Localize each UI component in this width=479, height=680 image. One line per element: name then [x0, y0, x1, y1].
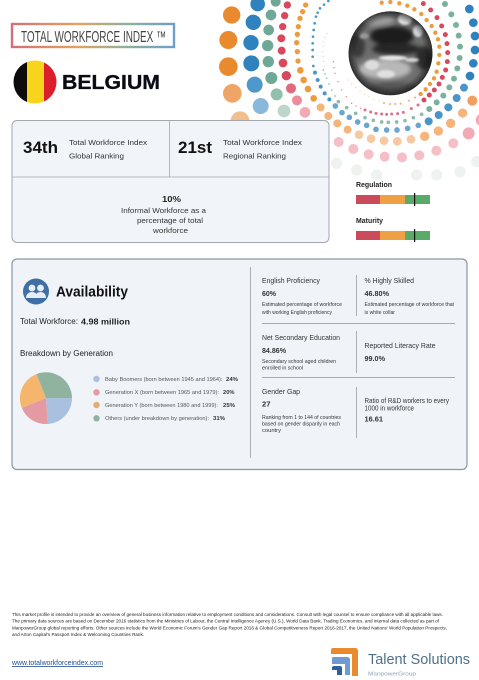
footer disclaimer: ManpowerGroup global reporting efforts. Other sources include the World Economic Forum's Gender Gap Report 2016 & Global Competitiveness Report 2016-2017, the United Nations' World Population Prospects, — [12, 626, 447, 630]
regional ranking — [178, 138, 302, 160]
total workforce: Total Workforce: — [20, 317, 78, 326]
footer disclaimer: The primary data sources are based on December 2016 statistics from the Ministries of Labour, the Central Intelligence Agency (U.S.), World Data Bank, Trading Economics, and internal data collected as part of — [12, 618, 440, 624]
stat: net secondary education: 84.86% — [262, 348, 287, 355]
informal workforce: workforce — [152, 226, 188, 235]
stat: gender gap: 27 — [262, 402, 271, 408]
icon: people — [23, 278, 49, 304]
availability heading: Availability — [56, 284, 128, 300]
decorative dotted rings — [219, 0, 479, 175]
stat: English proficiency: English Proficiency — [262, 276, 320, 285]
legend: Others (under breakdown by generation): — [105, 416, 209, 422]
stat: highly skilled: is white collar — [364, 310, 395, 316]
footer disclaimer — [12, 612, 447, 637]
stat: literacy rate: 99.0% — [364, 356, 386, 363]
legend: 20% — [223, 390, 235, 396]
stat: R&D ratio — [364, 396, 449, 424]
breakdown heading: Breakdown by Generation — [20, 349, 113, 358]
legend: 31% — [213, 416, 226, 422]
global ranking: Total Workforce Index — [69, 138, 147, 147]
total workforce: 4.98 million — [81, 316, 130, 326]
stat: highly skilled: % Highly Skilled — [364, 276, 414, 285]
stat: gender gap — [262, 387, 342, 434]
stat: English proficiency: 60% — [262, 291, 277, 298]
total workforce — [20, 316, 130, 326]
legend: Baby Boomers (born between 1945 and 1964): — [105, 377, 222, 383]
country name: BELGIUM — [62, 72, 160, 94]
legend: Generation X (born between 1965 and 1979): — [105, 390, 219, 396]
stat: literacy rate: Reported Literacy Rate — [364, 341, 436, 350]
stat: net secondary education — [262, 333, 340, 372]
stat: net secondary education: enrolled in school — [262, 366, 303, 372]
stat: English proficiency: with working English proficiency — [262, 310, 332, 316]
panel: rankings — [12, 120, 329, 242]
legend: Generation Y (born between 1980 and 1999): — [105, 403, 218, 409]
stat: gender gap: based on gender disparity in each — [262, 422, 340, 428]
stat: net secondary education: Net Secondary Education — [262, 333, 340, 342]
stat: gender gap: Gender Gap — [262, 387, 300, 396]
website link: www.totalworkforceindex.com — [11, 660, 103, 667]
icon: globe — [348, 11, 432, 95]
title badge: TOTAL WORKFORCE INDEX ™ — [21, 29, 166, 46]
informal workforce: Informal Workforce as a — [121, 206, 207, 215]
stat: gender gap: country — [262, 428, 282, 434]
global ranking: Global Ranking — [69, 152, 124, 160]
stat: highly skilled — [364, 276, 455, 316]
stat: English proficiency — [262, 276, 342, 316]
icon: Belgian flag — [13, 60, 58, 104]
gauge: regulation: Regulation — [356, 182, 392, 189]
gauge: regulation — [356, 182, 430, 206]
logo: Talent Solutions — [331, 648, 470, 678]
legend — [93, 376, 239, 422]
gauge: maturity — [356, 218, 430, 242]
regional ranking: 21st — [178, 139, 213, 157]
gauge: maturity: Maturity — [356, 218, 383, 225]
stat: literacy rate — [364, 341, 436, 363]
title badge — [12, 24, 174, 47]
legend: 25% — [223, 403, 236, 409]
informal workforce — [121, 194, 207, 235]
stat: R&D ratio: Ratio of R&D workers to every — [364, 396, 449, 405]
logo: Talent Solutions: ManpowerGroup — [368, 672, 416, 678]
legend: 24% — [226, 377, 239, 383]
informal workforce: percentage of total — [137, 216, 203, 225]
stat: net secondary education: Secondary school aged children — [262, 359, 336, 365]
stat: highly skilled: Estimated percentage of workforce that — [364, 302, 455, 308]
regional ranking: Regional Ranking — [223, 152, 286, 160]
global ranking — [23, 138, 147, 160]
regional ranking: Total Workforce Index — [223, 138, 302, 147]
stat: highly skilled: 46.80% — [364, 291, 390, 298]
stat: R&D ratio: 16.61 — [364, 416, 383, 424]
pie chart — [20, 372, 72, 424]
logo: Talent Solutions: Talent Solutions — [368, 651, 470, 668]
footer disclaimer: and Arton Capital's Passport Index & Welcoming Countries Rank. — [12, 632, 144, 637]
informal workforce: 10% — [162, 194, 181, 204]
stat: English proficiency: Estimated percentage of workforce — [262, 302, 342, 308]
panel: availability — [12, 259, 467, 470]
stat: gender gap: Ranking from 1 to 144 of countries — [262, 415, 342, 421]
stat: R&D ratio: 1000 in workforce — [364, 404, 414, 412]
global ranking: 34th — [23, 139, 58, 157]
footer disclaimer: This market profile is intended to provide an overview of general business information relative to employment conditions and considerations. Consult with legal counsel to ensure compliance with all applicable laws. — [12, 612, 443, 617]
